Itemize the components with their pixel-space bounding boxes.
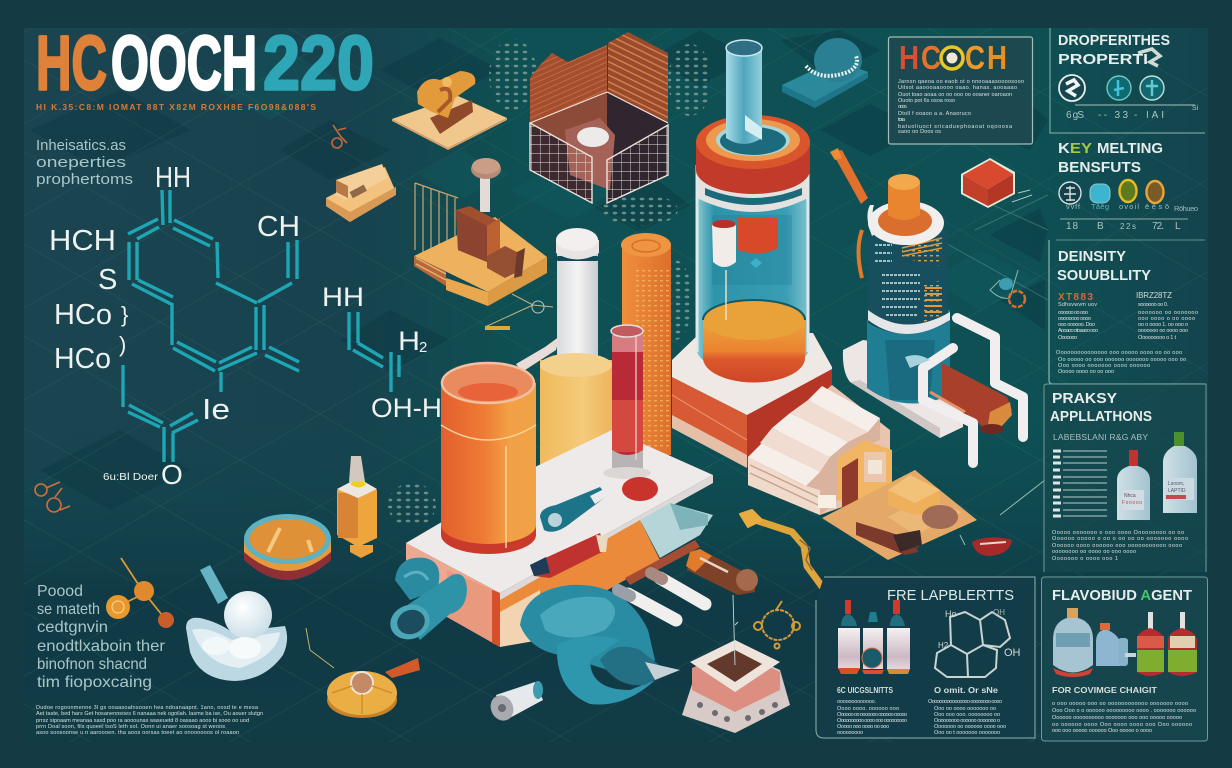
icon: gold ring molecule <box>754 601 800 648</box>
column text: Ooooo ooo oooo oo ooo <box>837 724 889 730</box>
white ring <box>697 170 808 212</box>
chemical structure right: HH <box>322 282 364 312</box>
icon: brown tool <box>686 549 758 595</box>
large orange jar <box>441 363 536 554</box>
values: ēēsō <box>1145 202 1169 211</box>
heading: MELTING <box>1097 140 1163 157</box>
icon: small molecule left <box>35 482 70 512</box>
heading: KEY <box>1058 140 1092 157</box>
values <box>1066 202 1198 213</box>
values: Tāēg <box>1091 202 1109 211</box>
body text: Ooooo ooooooo o ooo oooo Ooooooooo oo oo <box>1052 530 1184 536</box>
chemical structure right <box>322 282 442 423</box>
molecule: Ho <box>945 609 957 619</box>
column text <box>837 699 1006 736</box>
heading: DEINSITY <box>1058 248 1126 265</box>
heading <box>1058 32 1170 68</box>
atom labels: HCo <box>54 299 112 331</box>
values: Rōhueo <box>1174 204 1198 213</box>
atom labels <box>49 162 300 490</box>
body text: Oooooo ooooo o oo o oo oo oo ooooooo oooo <box>1052 536 1188 542</box>
heading text: enodtlxaboin ther <box>37 638 166 655</box>
heading: DROPFERITHES <box>1058 32 1170 49</box>
body text: oooo. <box>898 104 907 110</box>
body text: batuoliuoct sricaduephoaoat oqooosa <box>898 124 1013 130</box>
column text: Ooooooo oo oooooo oooo ooo <box>934 724 1006 730</box>
panel: key melting: 22s <box>1120 222 1136 231</box>
small print: prrn Doal soon, fils quoeel tsoS leth soI. Oonn ui anaer soosoag st weoos <box>36 724 225 730</box>
icon: red pen <box>530 533 608 578</box>
icon: brick stacks with cage <box>530 32 668 203</box>
icon: red cube <box>961 158 1032 208</box>
heading <box>1050 390 1152 425</box>
property values: -- 33 <box>1098 110 1128 121</box>
red tube <box>942 363 1012 428</box>
atom labels: O <box>161 459 183 490</box>
heading text: se mateth <box>37 601 100 618</box>
dot clusters <box>388 39 712 527</box>
small print: asoo soosoonse u n aaroooen. tha aoos oorsas toeet ao onoooooos ol roaaon <box>36 730 239 736</box>
heading <box>899 39 1007 76</box>
atom labels: HH <box>155 162 191 194</box>
atom labels: CH <box>257 211 300 243</box>
glass tube <box>726 48 762 144</box>
small print: Aet taste, bed hars Get hosanennsoes 6 nanaaa nek ogoilah. lasme ba ise, Ou aouer slutgn <box>36 711 263 717</box>
property values: 6 gS <box>1066 110 1084 121</box>
inner parts <box>738 218 778 254</box>
icon: small box device <box>326 164 396 222</box>
cap <box>888 183 920 220</box>
atom labels: ) <box>119 332 126 357</box>
body text: Oooooo oooo oooooo ooo ooooooooooo oooo <box>1052 543 1182 549</box>
body text: Ouot toao aoaa oo oo ooo oo ooaner oaroaon <box>898 92 1012 98</box>
panel: density solubility: ooo oooo o oo oooo <box>1138 316 1195 322</box>
chemical structure right: 2 <box>419 339 427 356</box>
heading: SOUUBLLITY <box>1057 267 1151 284</box>
panel: density solubility: oo o oooo 1. oo ooo o <box>1138 322 1188 328</box>
bottle one <box>1129 450 1138 467</box>
press column <box>480 172 490 212</box>
orange bottle <box>337 456 377 558</box>
body text: Oooooo oooooooooo ooooooo ooo ooo ooooo ooooo <box>1052 715 1182 721</box>
column text: Oooooooooooooooo oooooooo oooo <box>928 699 1002 705</box>
body text: Dtoll f ooaoo a a. Anaoruco <box>898 111 971 117</box>
body text <box>1052 530 1188 562</box>
base <box>414 217 547 292</box>
body text: Ouoto pot 6s osoa roso <box>898 98 955 104</box>
icon: orange arm <box>740 510 829 596</box>
body text: Ooooooo o oooo ooo 1 <box>1052 556 1118 562</box>
panel: density solubility: Sdhsvwvm uov <box>1058 302 1097 308</box>
panel: key melting <box>1056 140 1205 240</box>
footnote <box>1056 350 1186 375</box>
cage grid <box>530 123 592 203</box>
molecule: H2 <box>938 641 949 650</box>
chemical structure left <box>49 162 300 490</box>
body text: Uilsot aaoooaaoooo oaao. hanas. aooaaao <box>898 85 1017 91</box>
column text: Oooooooooo oooo ooo ooooooooo <box>837 718 907 724</box>
body text: o ooo ooooo ooo oo oooooooooooo ooooooo oooo <box>1052 701 1188 707</box>
heading: PROPERTI <box>1058 51 1148 68</box>
column text: ooooooooooooo. <box>837 699 876 705</box>
test tube <box>603 325 651 479</box>
bottom-left text <box>36 583 263 736</box>
white collar <box>868 310 950 334</box>
icons <box>1059 182 1081 204</box>
bottle two <box>1174 432 1184 448</box>
icon: orange molecule <box>106 558 174 628</box>
molecule <box>935 608 1021 677</box>
body text: oooooooo oo oooo oo ooo oooo <box>1052 549 1136 555</box>
heading: APPLLATHONS <box>1050 408 1152 425</box>
icon: cutting board with food <box>822 470 1045 560</box>
connector <box>485 294 553 327</box>
panel: primary applications: Lsoom, <box>1168 481 1184 487</box>
property values: Si <box>1192 105 1199 112</box>
bottles <box>1053 608 1197 677</box>
icon: large teal nozzle <box>520 585 680 704</box>
heading text: tim fiopoxcaing <box>37 674 152 691</box>
title: HC <box>36 20 107 106</box>
panel: density solubility: ooooooo oo ooooooo <box>1138 310 1198 316</box>
small print: Dudoe rogoonmenne 3l gs ooaasoalnsooen hea ndoanaapnt. 1ano, oosd te e mesa <box>36 705 259 711</box>
title: OOCH <box>111 20 257 106</box>
body text: ooo ooo ooooo oooooo Ooo ooooo o oooo <box>1052 728 1152 734</box>
molecule: OH <box>1004 647 1021 659</box>
cage interior <box>530 92 607 157</box>
orange handle <box>858 230 862 278</box>
panel: primary applications: Fooooo <box>1122 500 1142 506</box>
panel: properties <box>1050 28 1205 133</box>
atom labels: HCH <box>49 225 116 257</box>
subheading: FOR COVIMGE CHAIGIT <box>1052 685 1158 695</box>
panel: primary applications: LAPTID <box>1168 488 1186 494</box>
column one: XT883 <box>1058 292 1093 303</box>
chemical structure right: H <box>398 326 420 356</box>
footnote: Oo ooooo oo ooo oooooo ooooooo ooooo ooo oo <box>1058 357 1186 363</box>
panel: density solubility: soooooo oo 0. <box>1138 302 1168 308</box>
heading: FRE LAPBLERTTS <box>887 587 1014 604</box>
icon: small orange ring connector <box>990 270 1025 307</box>
list rows <box>1063 451 1107 516</box>
panel: density solubility: Ooooooo <box>1058 335 1077 341</box>
bonds <box>123 190 299 462</box>
heading text <box>37 583 166 691</box>
panel: density solubility <box>1049 240 1205 384</box>
values: ovoil <box>1119 202 1139 211</box>
chemical structure right: OH-H <box>371 393 442 423</box>
atom labels: HCo <box>54 343 111 375</box>
icon: teal wrench <box>540 486 614 532</box>
white frame <box>957 318 1023 437</box>
icon: small orange molecule <box>332 125 347 148</box>
title <box>36 20 374 106</box>
body text: trosa <box>898 117 906 123</box>
heading: PRAKSY <box>1052 390 1117 407</box>
icon: orange machine on tile <box>392 71 507 150</box>
heading: FLAVOBIUD AGENT <box>1052 587 1192 604</box>
panel: density solubility: oooooo oo ooo <box>1058 310 1088 316</box>
column text: Ooo ooo ooo. oooooooo oo <box>934 712 1000 718</box>
cage bars <box>415 183 458 268</box>
panel: primary applications: LABEBSLANI R&G ABY <box>1053 432 1148 442</box>
heading: C <box>921 39 941 76</box>
white base <box>843 340 963 438</box>
footnote: Ooo oooo ooooooo oooo oooooo <box>1058 363 1150 369</box>
panel: key melting: 72. <box>1152 221 1164 232</box>
heading <box>1057 248 1151 284</box>
icon: white bowl with ball <box>186 565 287 681</box>
body text: Ooo Ooo o o oooooo ooooooooo oooo . ooooooo oooooo <box>1052 708 1196 714</box>
column labels: O omit. Or sNe <box>934 685 998 695</box>
intro text: Inheisatics.as <box>36 137 126 154</box>
white cylinder <box>557 245 598 370</box>
liquid <box>703 320 805 382</box>
column text: ooooooooo <box>837 730 863 736</box>
panel: primary applications <box>1044 384 1206 572</box>
panel: density solubility: ooo oooooo. Doo <box>1058 322 1095 328</box>
heading <box>1058 140 1163 176</box>
column text: Oooo oooo. oooooo ooo <box>837 706 899 712</box>
panel: flavouring agent <box>1042 577 1208 741</box>
column text: Ooo oo oooo ooooooo oo <box>934 706 996 712</box>
yellow jar <box>540 360 612 470</box>
icon: press platform <box>414 158 553 330</box>
orange cylinder <box>622 245 671 455</box>
body text <box>898 79 1024 135</box>
red collar <box>696 142 810 194</box>
icon: ceramic pad <box>682 595 790 733</box>
stacked steps <box>748 385 892 515</box>
footnote: Ooooo oooo oo oo ooo <box>1058 369 1114 375</box>
glass body <box>697 165 808 373</box>
reactor vessel <box>672 40 832 468</box>
bottles <box>838 600 910 674</box>
body text: Jarnsn qaeoa oo eaob ot o nnooaaasoooosooo <box>898 79 1024 85</box>
panel: density solubility: oooooooo oooo <box>1058 316 1091 322</box>
column labels <box>837 685 998 695</box>
white lab platform <box>406 430 713 647</box>
teal lower body <box>867 310 950 404</box>
intro text: prophertoms <box>36 171 133 188</box>
heading text: cedtgnvin <box>37 619 108 636</box>
column labels: 6C UICGSLNITTS <box>837 685 893 695</box>
intro text: oneperties <box>36 154 126 171</box>
panel: key melting: 18 <box>1066 221 1078 232</box>
bricks <box>530 45 607 125</box>
property icons <box>1059 75 1085 101</box>
heading text: binofnon shacnd <box>37 656 147 673</box>
body text <box>1052 701 1196 734</box>
panel: density solubility: Ooooooooo o 1 t <box>1138 335 1176 341</box>
property values <box>1066 105 1199 121</box>
panel: HCOCH <box>888 37 1032 144</box>
atom labels: Ie <box>202 394 230 426</box>
panel: density solubility: ooooooo oo oooo ooo <box>1138 328 1188 334</box>
body text: oo oooooo oooo Ooo oooo oooo ooo Ooo oooooo <box>1052 722 1192 728</box>
molecule: OH <box>993 608 1005 617</box>
property values: - IAI <box>1134 110 1164 121</box>
icon: white rods <box>618 573 705 620</box>
body text: saoo oo Doos os <box>898 129 941 135</box>
column text: Ooo oo t ooooooo ooooooo <box>934 730 1000 736</box>
footnote: Ooooooooooooooo ooo ooooo oooo oo oo ooo <box>1056 350 1182 356</box>
heading: H <box>899 39 919 76</box>
panel: key melting: L <box>1175 221 1181 232</box>
icon: orange disc <box>306 628 420 718</box>
small print <box>36 705 263 736</box>
panel: primary applications: Nhca <box>1124 493 1136 499</box>
title: 220 <box>263 20 374 106</box>
panel: free lapblertts <box>816 577 1035 738</box>
atom labels: } <box>121 302 128 327</box>
atom labels: 6u:Bl Doer <box>103 472 159 483</box>
icon: teal pipe left <box>385 558 467 645</box>
orange pump bottle <box>830 148 1023 463</box>
icon: teal hat on tile <box>782 38 868 108</box>
values: vvff <box>1066 202 1081 211</box>
base <box>672 377 747 467</box>
column two: IBRZ28TZ <box>1136 291 1172 300</box>
panel: key melting: B <box>1097 221 1104 232</box>
icon: white spool <box>487 681 543 724</box>
panel: density solubility: Aooaoo otoaaoo ooo <box>1058 328 1098 334</box>
heading: H <box>987 39 1007 76</box>
heading text: Poood <box>37 583 83 600</box>
heading: BENSFUTS <box>1058 159 1141 176</box>
orange bowl <box>244 514 331 580</box>
red button <box>622 477 658 501</box>
atom labels: S <box>98 264 117 296</box>
intro text <box>36 137 133 188</box>
label <box>868 230 948 334</box>
column text: Oooooo oo ooooooo oooooo ooooo <box>837 712 907 718</box>
column text: Ooooooooo oooooo ooooooo o <box>934 718 1000 724</box>
heading: C <box>965 39 985 76</box>
small print: prrsz sipoaam meanaa saxd poo ra aooounas waseuetd 8 oasaao aoos bi sooo oo uod <box>36 718 249 724</box>
beaker group <box>516 228 671 470</box>
subtitle: HI K.35:C8:M IOMAT 88T X82M ROXH8E F6O98&088'S <box>36 102 316 112</box>
